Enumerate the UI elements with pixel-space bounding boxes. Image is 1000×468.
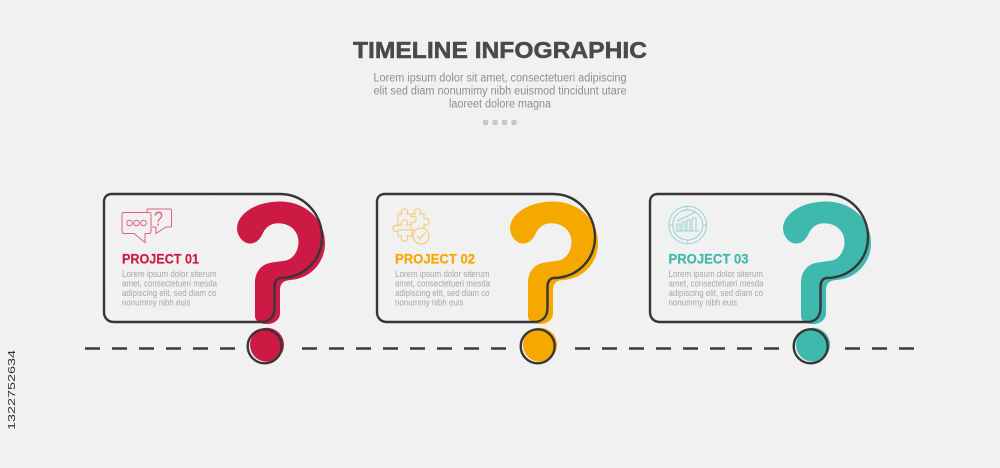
description: Lorem ipsum dolor siterum <box>395 269 490 279</box>
subtitle text block <box>374 72 626 110</box>
text: Stock <box>432 408 501 468</box>
panel: project 02 <box>377 194 598 363</box>
description: adipiscing elit, sed diam co <box>668 288 763 298</box>
description: nonummy nibh euis <box>395 298 464 308</box>
text: Adobe Stock <box>547 238 680 350</box>
dot fill <box>796 328 830 362</box>
dot outline <box>521 329 555 363</box>
question mark fill <box>237 202 325 324</box>
text: Adobe Stock <box>82 358 215 468</box>
panel: project 01 <box>104 194 325 363</box>
subtitle text block: Lorem ipsum dolor sit amet, consectetueri adipiscing <box>374 72 626 84</box>
text: Adobe Stock <box>42 73 175 185</box>
description: amet, consectetueri mesda <box>122 278 217 288</box>
text: Stock <box>772 408 841 468</box>
text: Adobe Stock <box>517 83 650 195</box>
icon: puzzle with check <box>393 209 429 244</box>
icon: speech bubbles: ? <box>154 208 163 230</box>
text: Adobe Stock <box>337 288 470 400</box>
description <box>668 269 764 308</box>
description <box>395 269 490 308</box>
card outline <box>104 194 322 322</box>
icon: chart in ring <box>669 206 706 244</box>
description: adipiscing elit, sed diam co <box>395 288 490 298</box>
text: Adobe Stock <box>837 118 970 230</box>
subtitle text block: laoreet dolore magna <box>449 98 552 110</box>
text: Adobe Stock <box>172 113 305 225</box>
text: Adobe Stock <box>712 73 845 185</box>
subtitle text block: elit sed diam nonumimy nibh euismod tincidunt utare <box>374 86 626 98</box>
description: nonummy nibh euis <box>668 298 737 308</box>
heading: PROJECT 02 <box>395 251 475 266</box>
heading: PROJECT 01 <box>122 251 199 266</box>
text: Adobe Stock <box>372 78 505 190</box>
icon: speech bubbles <box>122 208 172 242</box>
description: amet, consectetueri mesda <box>395 278 490 288</box>
text: Adobe Stock <box>7 273 140 385</box>
dot fill <box>250 328 284 362</box>
dot outline <box>248 329 282 363</box>
dot fill <box>523 328 557 362</box>
description: amet, consectetueri mesda <box>668 278 764 288</box>
description: Lorem ipsum dolor siterum <box>122 269 216 279</box>
title pagination dots <box>483 120 516 125</box>
description: Lorem ipsum dolor siterum <box>668 269 763 279</box>
description <box>122 269 217 308</box>
question mark fill <box>783 202 871 324</box>
text: Adobe Stock <box>672 293 805 405</box>
description: adipiscing elit, sed diam co <box>122 288 216 298</box>
card outline <box>377 194 595 322</box>
description: nonummy nibh euis <box>122 298 191 308</box>
stock image id: 1322752634 <box>7 349 18 430</box>
dashed timeline <box>85 347 915 350</box>
panel: project 03 <box>650 194 871 363</box>
heading: PROJECT 03 <box>668 251 749 266</box>
question mark fill <box>510 202 598 324</box>
dot outline <box>794 329 828 363</box>
title: TIMELINE INFOGRAPHIC <box>353 37 647 63</box>
card outline <box>650 194 868 322</box>
